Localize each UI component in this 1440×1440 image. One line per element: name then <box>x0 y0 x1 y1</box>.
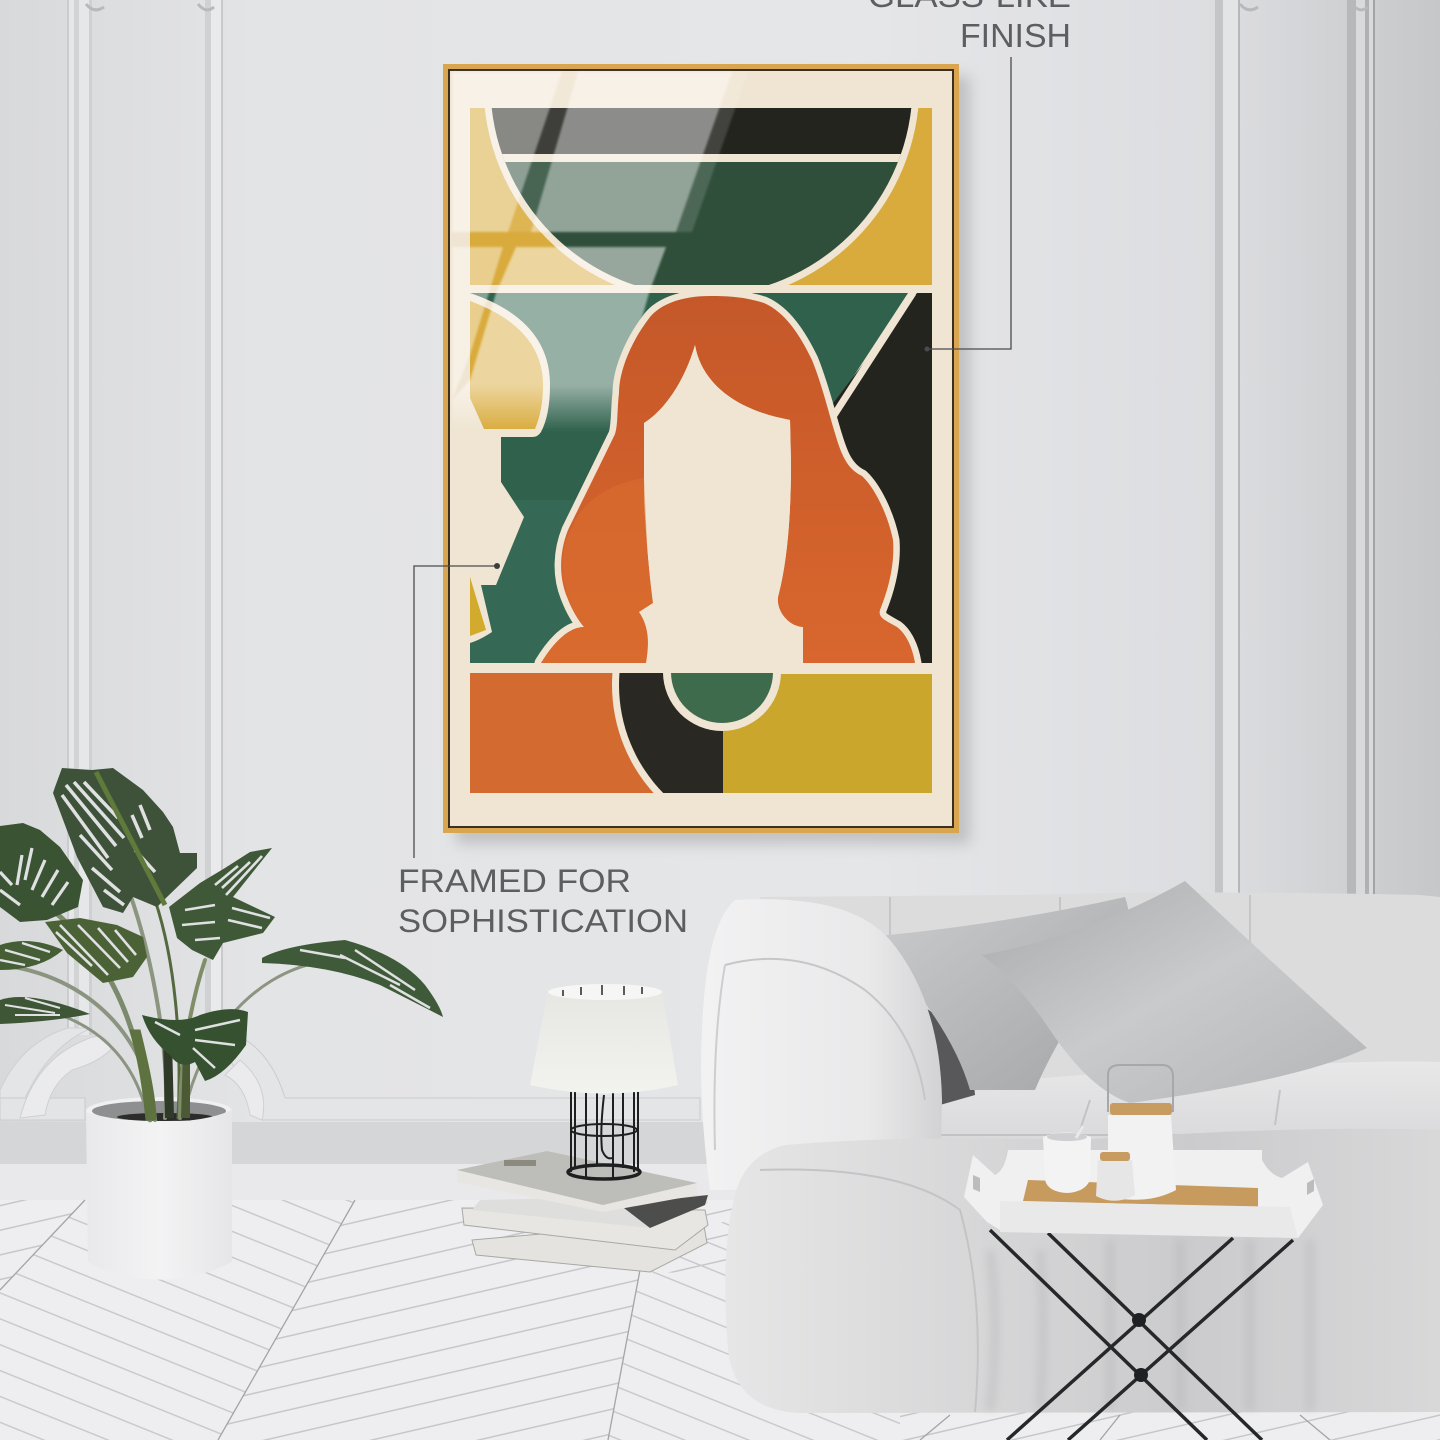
lamp shade <box>530 990 678 1094</box>
leaf long right <box>262 940 443 1017</box>
orange block <box>470 673 723 793</box>
hair <box>541 296 915 663</box>
tray <box>964 1150 1323 1238</box>
yellow triangle <box>470 577 486 636</box>
teapot <box>1108 1065 1176 1200</box>
dark inner frame line <box>448 69 954 828</box>
yellow block <box>723 674 932 793</box>
yellow head shape <box>470 301 543 429</box>
seat cushions <box>940 1061 1440 1170</box>
shadow gap <box>915 1000 975 1105</box>
callout: framed for sophistication: SOPHISTICATION <box>398 903 688 939</box>
left arm <box>701 899 942 1190</box>
leaf bottom <box>142 1009 248 1081</box>
leaf left top <box>0 823 83 922</box>
paper mat <box>450 71 952 826</box>
black arc <box>619 673 723 793</box>
pillow front <box>982 881 1367 1103</box>
bottom panel <box>470 673 932 793</box>
green half circle <box>671 673 773 723</box>
lamp cage <box>568 1092 640 1179</box>
sofa back <box>760 892 1440 1120</box>
plant <box>0 768 443 1120</box>
callout: framed for sophistication <box>398 563 688 939</box>
callout: glass-like finish: FINISH <box>960 17 1071 54</box>
side table <box>964 1065 1323 1440</box>
framed artwork <box>443 0 959 846</box>
leaf left low <box>0 997 90 1024</box>
stems <box>0 880 320 1120</box>
glass reflection <box>452 72 748 450</box>
bowl panel <box>470 108 932 285</box>
floor <box>0 1200 1440 1440</box>
black wedge <box>833 293 932 663</box>
leaf left middle <box>0 941 63 970</box>
leaf centre left <box>45 918 147 983</box>
callout: framed for sophistication: FRAMED FOR <box>398 863 631 899</box>
cream left silhouette <box>470 293 550 643</box>
wooden board <box>1023 1180 1258 1207</box>
framed artwork shadow <box>456 76 970 844</box>
green ground <box>470 293 908 663</box>
tray handles <box>973 1175 1314 1195</box>
diagonal cream line <box>834 294 916 417</box>
books <box>457 1151 708 1272</box>
small jar <box>1096 1152 1135 1201</box>
plant pot front <box>86 1110 232 1280</box>
gold frame <box>443 64 959 833</box>
table lamp <box>530 984 678 1179</box>
front seat <box>725 1129 1440 1413</box>
cup <box>1043 1126 1091 1193</box>
leaf top big <box>53 768 197 913</box>
face <box>639 345 803 663</box>
portrait panel <box>470 293 932 663</box>
sofa <box>701 881 1440 1413</box>
pillow rear <box>868 897 1129 1090</box>
plant pot back <box>86 1097 232 1125</box>
hair watercolour wash <box>541 478 653 663</box>
callout: glass-like finish <box>868 0 1071 352</box>
leaf right upper <box>169 848 275 960</box>
baseboard <box>0 1164 1440 1200</box>
table legs <box>990 1230 1293 1440</box>
wall mouldings <box>0 0 1375 1120</box>
